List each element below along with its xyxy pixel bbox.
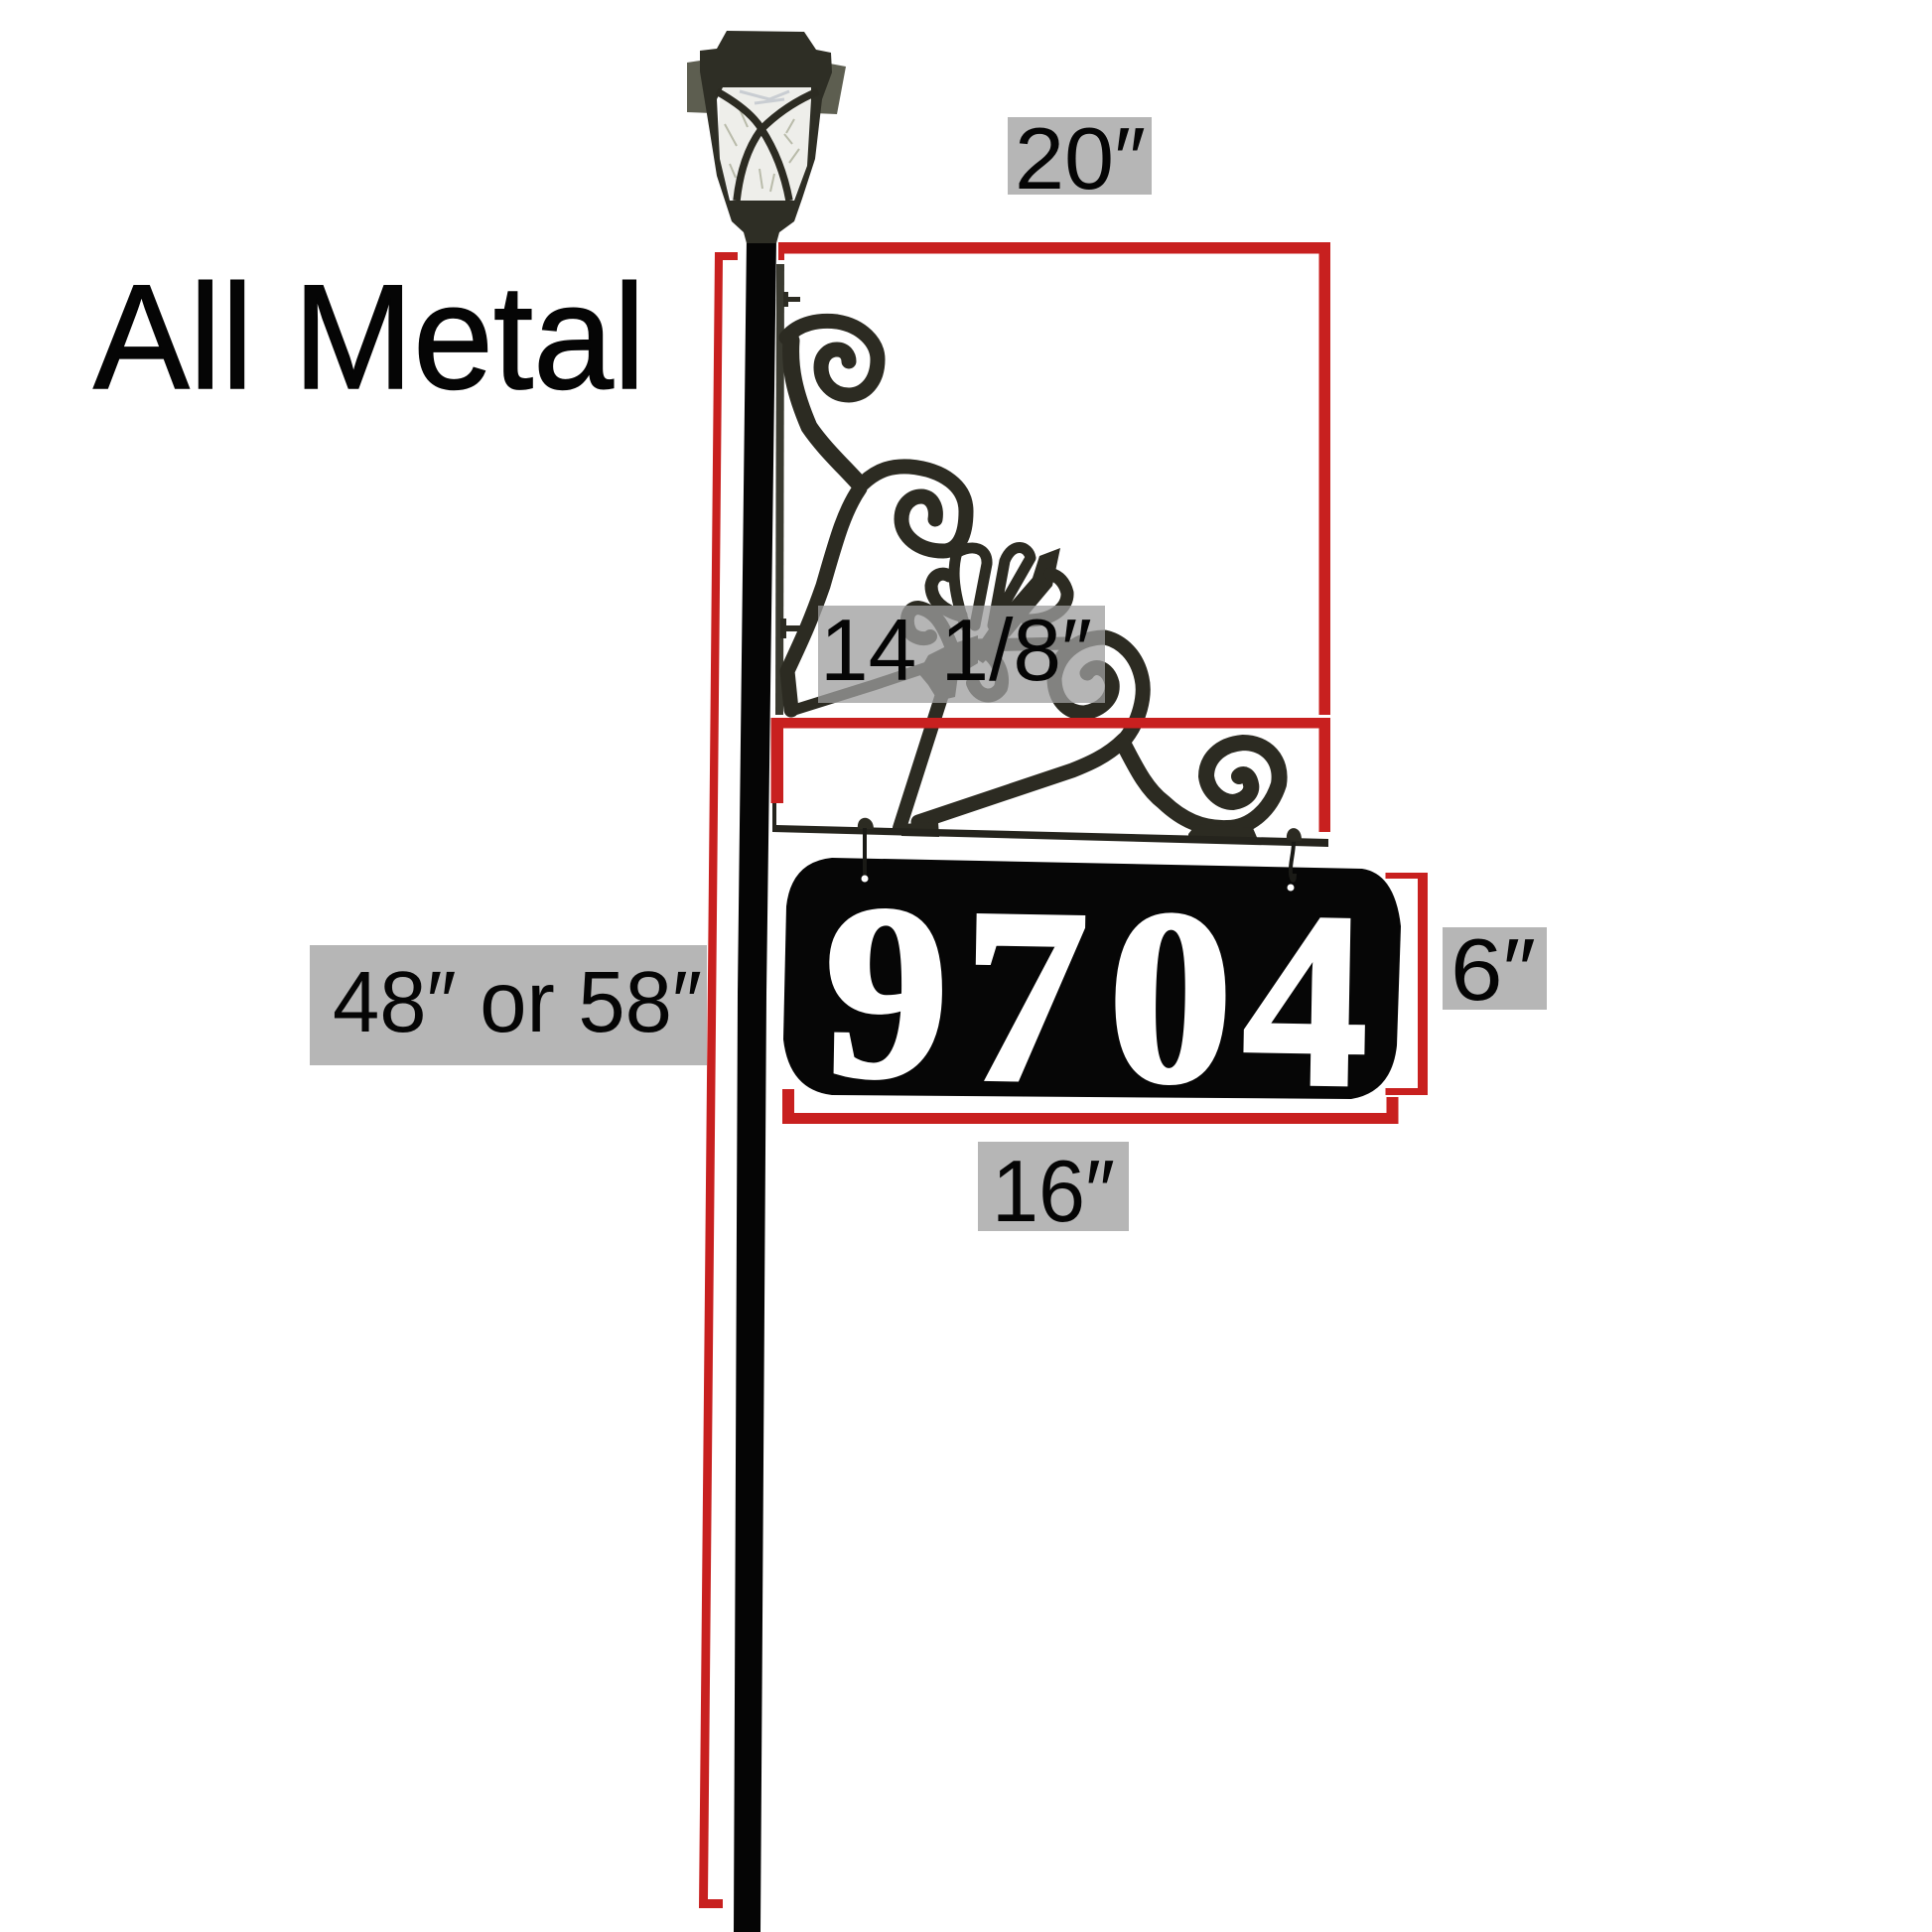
dimension bracket: 16 inch: [782, 1089, 1398, 1124]
dimension bracket: 6 inch: [1386, 873, 1428, 1095]
bar bolts: [858, 818, 1302, 841]
lamp side flanges: [687, 60, 846, 114]
horizontal bar to right scroll: [973, 643, 1065, 645]
left hook: [907, 608, 951, 645]
mounting strip: [775, 264, 784, 715]
lower stem: [899, 685, 945, 828]
fan side loops: [931, 574, 1067, 621]
hanging bar: [772, 803, 1328, 847]
dimension bracket: pole height: [699, 252, 738, 1908]
main S stem: [791, 341, 860, 484]
icon: solar lamp: [687, 31, 846, 243]
lamp glass texture: [725, 91, 799, 192]
label: 14 1/8 inch: 14 1/8″: [820, 601, 1092, 699]
long inner stem: [787, 488, 860, 710]
house number digits: 4: [1241, 862, 1370, 1139]
lamp body and roof: [700, 31, 832, 243]
mounting bolts: [780, 292, 800, 638]
top scroll: [786, 321, 878, 395]
label: 16 inch: 16″: [992, 1142, 1115, 1240]
lower arm: [918, 740, 1124, 822]
house number digits: 9: [822, 854, 951, 1131]
lamp glass: [717, 85, 814, 203]
hub: [918, 635, 978, 701]
second scroll: [863, 467, 966, 551]
right large scroll: [1054, 637, 1143, 742]
pole: [734, 238, 776, 1932]
mounting holes: [862, 876, 868, 882]
lower right S scroll: [1125, 743, 1280, 828]
lamp crossing bars: [717, 91, 818, 201]
ironwork bracket: [772, 264, 1328, 847]
lower feet: [901, 822, 1259, 842]
house number digits: [822, 854, 1370, 1139]
fan ornament: [907, 547, 1067, 701]
fan petals: [954, 547, 1031, 625]
plate: [783, 858, 1401, 1099]
lower hook: [973, 647, 1002, 695]
sign plate with house number: [783, 828, 1401, 1139]
hanging hooks: [865, 828, 1295, 881]
dimension bracket: 14 1/8 inch: [770, 718, 1330, 832]
house number digits: 7: [961, 858, 1090, 1135]
diagonal arm to hub: [791, 665, 933, 711]
title: All Metal: All Metal: [93, 253, 645, 420]
house number digits: 0: [1106, 859, 1235, 1136]
dimension bracket: 20 inch: [778, 242, 1330, 715]
fan spear: [971, 548, 1060, 663]
label: 6 inch: 6″: [1450, 920, 1536, 1019]
label: 48 or 58 inch: 48″ or 58″: [333, 954, 702, 1050]
label: 20 inch: 20″: [1015, 109, 1146, 207]
